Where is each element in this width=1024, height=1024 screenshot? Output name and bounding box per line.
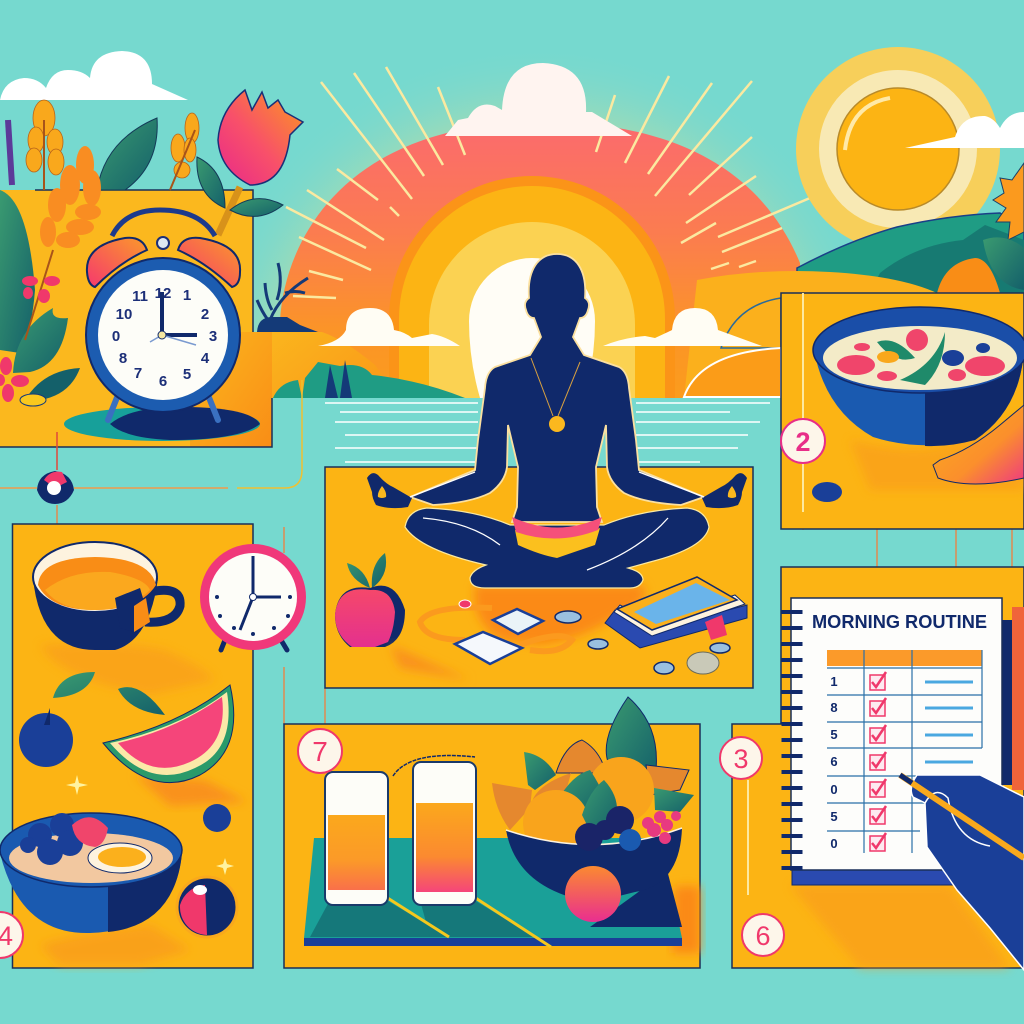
figure finger gaps bbox=[378, 486, 736, 498]
panel: soup bbox=[781, 293, 1024, 529]
panel: tea and breakfast bbox=[12, 524, 253, 968]
icon: blueberry bbox=[19, 708, 73, 767]
figure: meditating person bbox=[367, 254, 747, 588]
icon: notebook checklist: 6 bbox=[830, 754, 838, 769]
icon: notebook checklist: 1 bbox=[830, 674, 838, 689]
icon: alarm clock: 5 bbox=[183, 366, 191, 383]
icon: soup bowl bbox=[813, 307, 1024, 446]
figure legs bbox=[405, 508, 709, 588]
necklace bbox=[531, 358, 580, 416]
illustration: ground left bbox=[253, 332, 398, 447]
icon: alarm clock: 7 bbox=[134, 365, 142, 382]
badge: 3 bbox=[720, 737, 762, 779]
icon: small blueberry bbox=[203, 804, 231, 832]
illustration: sunrise bbox=[278, 67, 810, 398]
icon: alarm clock bbox=[64, 210, 260, 441]
icon: notebook checklist: 0 bbox=[830, 782, 838, 797]
icon: alarm clock: 11 bbox=[132, 288, 148, 305]
icon: pink clock bbox=[200, 544, 306, 650]
icon: alarm clock: 2 bbox=[201, 306, 209, 323]
badge: 6: 6 bbox=[755, 921, 771, 951]
badge: 7: 7 bbox=[312, 736, 328, 767]
icon: timer bbox=[177, 877, 237, 937]
illustration: right cloud bbox=[905, 112, 1024, 148]
waistband bbox=[512, 517, 602, 539]
sparkles bbox=[66, 775, 234, 875]
icon: books bbox=[605, 577, 747, 648]
panel: meditation bbox=[325, 467, 753, 688]
illustration: central cloud bbox=[445, 63, 632, 136]
illustration: leaves bbox=[53, 672, 165, 715]
illustration: items on mat bbox=[420, 600, 730, 674]
icon: notebook checklist: 0 bbox=[830, 836, 838, 851]
illustration: leaves and flowers top-left bbox=[0, 100, 199, 406]
illustration: small plant bbox=[257, 263, 318, 332]
panel: alarm clock backdrop bbox=[0, 190, 272, 447]
icon: alarm clock: 4 bbox=[201, 350, 210, 367]
illustration: island bbox=[273, 360, 465, 398]
illustration: sea lines bbox=[325, 403, 770, 462]
panel: juice and fruit bbox=[284, 724, 700, 968]
highlights bbox=[410, 472, 704, 570]
badge: 3: 3 bbox=[733, 744, 749, 774]
icon: banana bbox=[933, 405, 1024, 484]
badge: 2 bbox=[781, 419, 825, 463]
badge: 6 bbox=[742, 914, 784, 956]
panel edge bbox=[0, 190, 272, 447]
figure torso bbox=[410, 254, 704, 522]
panel: checklist bbox=[732, 567, 1024, 968]
icon: alarm clock: 12 bbox=[155, 285, 171, 302]
icon: hand with pencil bbox=[900, 775, 1024, 970]
icon: notebook checklist bbox=[791, 598, 1012, 885]
icon: connector dot bbox=[37, 471, 74, 504]
icon: alarm clock: 3 bbox=[209, 328, 217, 345]
illustration: mat shadow bbox=[474, 585, 646, 645]
badge: 2: 2 bbox=[795, 427, 811, 457]
connector lines bbox=[0, 380, 1012, 724]
icon: grapefruit slice bbox=[103, 685, 234, 783]
icon: sun bbox=[796, 47, 1000, 251]
pendant bbox=[549, 416, 565, 432]
icon: fruit bowl bbox=[492, 697, 694, 922]
illustration: apple bbox=[335, 553, 470, 680]
sky glow bbox=[190, 45, 890, 398]
icon: notebook checklist: 5 bbox=[830, 727, 838, 742]
line: soup panel marker bbox=[802, 293, 804, 512]
illustration: clouds near horizon bbox=[318, 308, 762, 346]
icon: notebook checklist: 8 bbox=[830, 700, 838, 715]
text: morning routine heading: MORNING ROUTINE bbox=[812, 612, 987, 632]
icon: alarm clock: 10 bbox=[116, 306, 132, 323]
badge: 4 bbox=[0, 912, 23, 958]
illustration: hills bbox=[684, 213, 1024, 398]
loincloth bbox=[515, 528, 600, 558]
icon: alarm clock: 8 bbox=[119, 350, 127, 367]
icon: notebook checklist: 5 bbox=[830, 809, 838, 824]
figure hands bbox=[367, 473, 747, 508]
icon: alarm clock: 0 bbox=[112, 328, 120, 345]
icon: blue pebble bbox=[812, 482, 842, 502]
icon: sunflower bbox=[983, 163, 1024, 290]
badge: 7 bbox=[298, 729, 342, 773]
icon: tea cup bbox=[33, 542, 180, 650]
illustration: top-left cloud bbox=[0, 51, 188, 100]
icon: alarm clock: 1 bbox=[183, 287, 191, 304]
panel: ground strip bbox=[190, 332, 272, 447]
icon: alarm clock: 6 bbox=[159, 373, 167, 390]
icon: oatmeal bowl bbox=[0, 813, 182, 933]
icon: juice glasses bbox=[325, 756, 476, 905]
icon: tulip bbox=[197, 90, 303, 235]
